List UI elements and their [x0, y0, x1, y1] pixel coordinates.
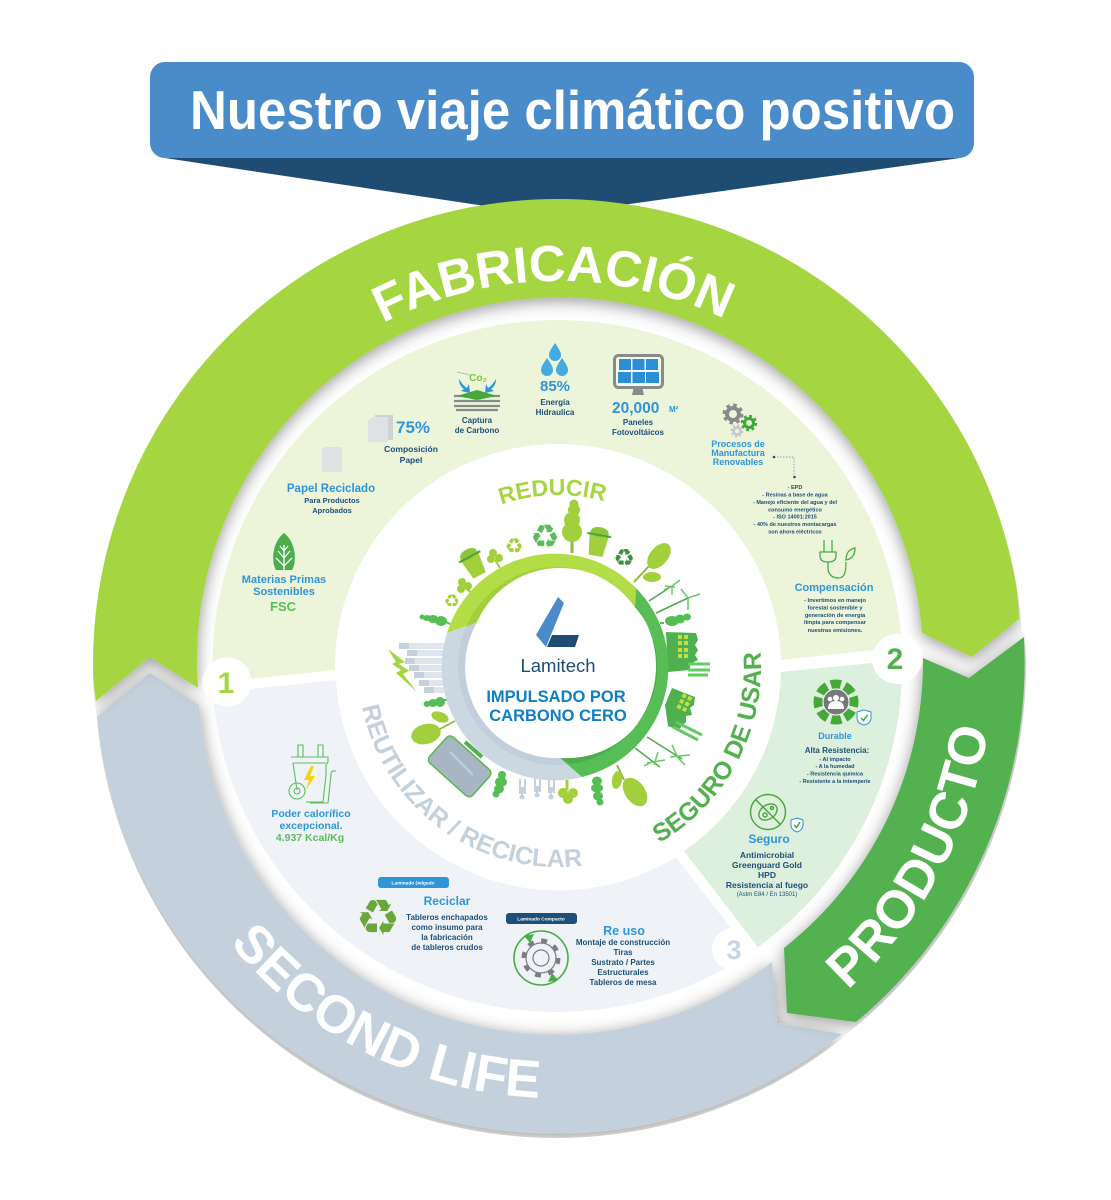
text: re uso: Estructurales: [597, 968, 649, 977]
text: durable: Durable: [818, 731, 852, 741]
text: durable: - Al impacto: [819, 757, 851, 763]
decor: top objects: ♻: [613, 544, 635, 572]
text: durable: - A la humedad: [815, 764, 855, 770]
text: reciclar: como insumo para: [411, 923, 483, 932]
text: reciclar: Tableros enchapados: [406, 913, 488, 922]
text: durable: Alta Resistencia:: [805, 746, 869, 755]
decor: left objects: [388, 578, 472, 707]
text: re uso: Sustrato / Partes: [591, 958, 655, 967]
icon: durable: [814, 680, 858, 724]
text: compensacion: [795, 582, 874, 634]
text: compensacion: Compensación: [795, 582, 874, 594]
text: compensacion: - Invertimos en manejo: [804, 598, 866, 604]
text: seguro: Greenguard Gold: [732, 860, 802, 870]
step number 3: 3: [726, 935, 742, 965]
decor: right objects: [611, 580, 710, 811]
step number 1: [202, 658, 252, 706]
panel: fabricacion: [213, 320, 902, 683]
ring: center green segment: [560, 588, 668, 777]
text: 20000 m2 paneles fotovoltaicos: Fotovoltáicos: [612, 428, 665, 437]
text: procesos de manufactura: Manufactura: [711, 448, 766, 458]
text: procesos de manufactura: Renovables: [713, 457, 763, 467]
icon: carbon capture: Co₂: [469, 373, 487, 384]
text: captura de carbono: Captura: [462, 416, 493, 425]
text: manufacturing list: - Manejo eficiente del agua y del: [753, 500, 837, 506]
text: 75 percent composicion papel: Composición: [384, 444, 438, 454]
icon: carbon capture: [454, 372, 500, 410]
text: reciclar: [406, 894, 488, 952]
title banner: [150, 62, 974, 206]
badge: laminado delgado: Laminado Delgado: [392, 880, 435, 886]
ring: second life: SECOND LIFE: [235, 926, 539, 1098]
logo: lamitech: Lamitech: [520, 655, 596, 676]
text: papel reciclado: Para Productos: [304, 496, 360, 505]
icon: plug bin: [289, 745, 336, 803]
ring: center grey segment: [442, 622, 582, 780]
step number 1: 1: [218, 667, 234, 700]
decor: top objects: ♻: [530, 517, 560, 556]
panel: second life: [213, 680, 750, 1012]
text: re uso: Tiras: [614, 948, 633, 957]
icon: paper stack: [368, 415, 393, 442]
ring: fabricacion: FABRICACIÓN: [371, 246, 736, 322]
text: re uso: Re uso: [603, 924, 645, 938]
text: manufacturing list: consumo energético: [768, 508, 823, 514]
text: compensacion: nuestras emisiones.: [808, 628, 863, 634]
panel: producto: [684, 660, 902, 947]
text: poder calorifico: 4.937 Kcal/Kg: [276, 832, 344, 844]
icon: plug with leaf: [820, 540, 855, 578]
text: compensacion: forestal sostenible y: [808, 606, 863, 612]
text: materias primas: Sostenibles: [253, 586, 315, 598]
text: manufacturing list: - 40% de nuestros montacargas: [754, 522, 836, 528]
text: impulsado por carbono cero: [486, 688, 627, 725]
decor: bottom objects: [409, 709, 604, 806]
text: manufacturing list: - ISO 14001:2015: [773, 514, 817, 520]
text: papel reciclado: Papel Reciclado: [287, 483, 375, 495]
heading: reutilizar reciclar: REUTILIZAR / RECICLAR: [362, 704, 582, 868]
icon: gears: [724, 405, 756, 436]
text: captura de carbono: de Carbono: [455, 426, 499, 435]
text: poder calorifico: excepcional.: [279, 820, 343, 832]
text: papel reciclado: [287, 483, 375, 515]
text: reciclar: Reciclar: [424, 894, 471, 908]
white center disc: [467, 576, 649, 758]
text: reciclar: la fabricación: [421, 933, 473, 942]
text: manufacturing list: - EPD: [788, 485, 802, 491]
icon: water drops: [541, 343, 568, 376]
ring: producto: PRODUCTO: [825, 727, 986, 988]
text: 20000 m2 paneles fotovoltaicos: 20,000: [612, 400, 659, 417]
text: compensacion: limpia para compensar: [804, 620, 867, 626]
text: re uso: [576, 924, 670, 987]
text: re uso: Montaje de construcción: [576, 938, 670, 947]
decor: left objects: ♻: [444, 591, 460, 612]
icon: gear cycle: [514, 931, 568, 985]
text: 75 percent composicion papel: [384, 418, 438, 465]
decor: top objects: ♻: [505, 534, 523, 558]
badge: laminado compacto: [506, 913, 577, 924]
text: materias primas: FSC: [270, 599, 297, 614]
ring: producto: [774, 636, 1026, 1034]
text: 85 percent energia hidraulica: 85%: [540, 378, 570, 395]
central illustration: [388, 500, 710, 811]
text: 20000 m2 paneles fotovoltaicos: Paneles: [623, 418, 654, 427]
text: seguro: HPD: [758, 870, 776, 880]
text: seguro: [726, 832, 808, 898]
text: impulsado por carbono cero: IMPULSADO POR: [486, 688, 626, 706]
step number 2: [872, 634, 922, 684]
text: manufacturing list: [753, 485, 837, 536]
text: seguro: (Astm E84 / En 13501): [737, 892, 797, 898]
text: materias primas: [242, 574, 326, 614]
text: 85 percent energia hidraulica: [536, 378, 575, 417]
icon: antimicrobial: [750, 794, 786, 830]
badge: laminado compacto: Laminado Compacto: [517, 916, 565, 922]
callout: dotted connector: [773, 456, 796, 478]
text: compensacion: generación de energía: [805, 613, 866, 619]
title banner: Nuestro viaje climático positivo: [190, 79, 955, 141]
icon: leaf: [273, 533, 295, 570]
text: seguro: Antimicrobial: [740, 850, 794, 860]
text: 85 percent energia hidraulica: Energía: [540, 398, 570, 407]
text: 20000 m2 paneles fotovoltaicos: [612, 400, 679, 437]
ring: center grey inner tone: [458, 622, 571, 765]
text: poder calorifico: [271, 808, 351, 844]
text: durable: - Resistencia química: [807, 772, 864, 778]
text: re uso: Tableros de mesa: [590, 978, 657, 987]
text: manufacturing list: son ahora eléctricos: [768, 530, 822, 536]
icon: recycling: ♻: [356, 889, 400, 947]
text: durable: [799, 731, 871, 785]
text: manufacturing list: - Resinas a base de agua: [762, 492, 829, 498]
text: materias primas: Materias Primas: [242, 574, 326, 586]
icon: shield seguro: [791, 818, 803, 832]
text: captura de carbono: [455, 416, 499, 435]
ring: second life: [96, 669, 844, 1138]
icon: shield durable: [857, 710, 871, 725]
text: papel reciclado: Aprobados: [312, 506, 352, 515]
icon: solar panel: [614, 356, 662, 395]
text: procesos de manufactura: [711, 439, 766, 467]
step number 2: 2: [887, 643, 903, 676]
text: impulsado por carbono cero: CARBONO CERO: [489, 707, 627, 725]
text: poder calorifico: Poder calorífico: [271, 808, 351, 820]
text: 20000 m2 paneles fotovoltaicos: M²: [669, 405, 679, 414]
text: procesos de manufactura: Procesos de: [711, 439, 765, 449]
logo: lamitech: [520, 597, 596, 676]
step number 3: [712, 928, 754, 970]
text: seguro: Seguro: [748, 832, 790, 846]
text: 85 percent energia hidraulica: Hidraulica: [536, 408, 575, 417]
ring: center light green segment: [447, 554, 636, 633]
icon: lightning: [304, 766, 315, 790]
decor: top objects: [455, 500, 676, 582]
badge: laminado delgado: [378, 877, 449, 888]
text: 75 percent composicion papel: 75%: [396, 418, 430, 437]
text: seguro: Resistencia al fuego: [726, 880, 808, 890]
text: reciclar: de tableros crudos: [411, 943, 483, 952]
text: 75 percent composicion papel: Papel: [400, 455, 422, 465]
heading: seguro de usar: SEGURO DE USAR: [653, 652, 762, 841]
heading: reducir: REDUCIR: [498, 479, 606, 504]
icon: recycled paper: [322, 447, 342, 472]
text: durable: - Resistente a la intemperie: [799, 779, 871, 785]
